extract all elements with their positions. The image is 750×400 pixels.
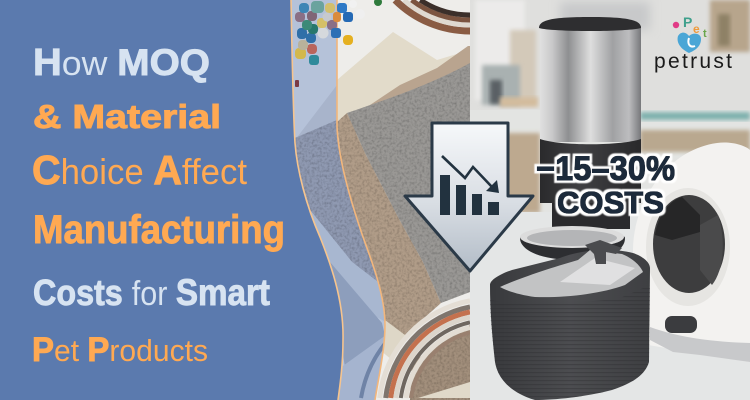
bars	[440, 175, 499, 215]
trend line	[442, 156, 499, 193]
product: feeder	[520, 17, 641, 260]
grey fur	[347, 63, 470, 303]
title panel	[0, 0, 343, 400]
heading: How MOQ	[33, 42, 210, 84]
logo mark	[673, 14, 707, 53]
photo: textile and material samples	[285, 0, 471, 400]
tan fur lower	[337, 113, 441, 335]
bowl	[520, 226, 625, 260]
heading	[32, 42, 285, 369]
heading: Manufacturing	[33, 208, 285, 252]
wavy translucent overlay band	[285, 0, 388, 400]
plastic pellets	[295, 0, 382, 87]
tan fur under coil	[410, 325, 470, 400]
heading: Pet Products	[32, 331, 208, 369]
logo mark: P	[683, 14, 692, 30]
cream woven fabric	[337, 32, 470, 160]
logo wordmark: petrust	[654, 50, 732, 73]
logo mark: e	[693, 22, 700, 36]
cream patch under coil	[418, 382, 470, 398]
logo mark: t	[703, 28, 707, 40]
product: litter box	[633, 142, 750, 362]
tan fur edge	[337, 46, 470, 135]
heading: Choice Affect	[32, 147, 247, 193]
photo: lab background	[470, 0, 750, 400]
wire coil top	[395, 0, 470, 31]
heading: & Material	[33, 98, 221, 135]
heading: Costs for Smart	[33, 272, 270, 313]
callout: cost reduction: COSTS	[557, 185, 664, 220]
icon: down arrow with falling bar chart	[405, 123, 533, 271]
callout: cost reduction: −15–30%	[536, 150, 675, 188]
cream fabric bottom	[380, 320, 405, 360]
wire coil bottom	[380, 301, 470, 398]
product: water fountain	[490, 240, 650, 400]
logo: petrust	[654, 14, 732, 73]
callout: cost reduction	[536, 150, 675, 220]
